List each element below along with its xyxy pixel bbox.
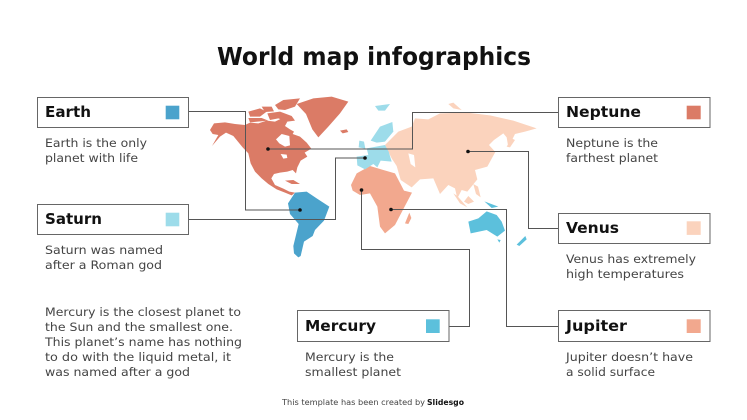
panel: Venus: high temperatures — [566, 267, 684, 281]
panel: Jupiter: Jupiter — [565, 317, 628, 335]
region: Africa — [351, 166, 412, 233]
footer credit: Slidesgo — [427, 398, 464, 407]
panel: Mercury: Mercury — [305, 317, 376, 335]
panel: Mercury: Mercury is the — [305, 350, 394, 364]
panel: Mercury — [298, 310, 449, 379]
region: Europe — [357, 104, 393, 169]
text block: Mercury description: the Sun and the smallest one. — [45, 320, 233, 334]
connector: Jupiter — [389, 208, 558, 326]
region: Asia — [385, 103, 537, 207]
panel: Venus — [558, 214, 710, 281]
panel: Earth: planet with life — [45, 151, 138, 165]
connector: Venus — [466, 150, 558, 228]
text block: Mercury description: This planet’s name has nothing — [44, 335, 242, 349]
panel: Mercury: smallest planet — [305, 365, 402, 379]
panel: Saturn: Saturn — [45, 210, 102, 228]
panel: Saturn: after a Roman god — [45, 258, 162, 272]
footer credit: This template has been created by — [281, 398, 426, 407]
panel: Saturn — [38, 204, 188, 272]
panel: Neptune — [558, 98, 710, 165]
panel: Jupiter — [558, 310, 710, 379]
panel: Earth: Earth — [45, 103, 91, 121]
text block: Mercury description: Mercury is the closest planet to — [45, 305, 241, 319]
region: South America — [288, 192, 329, 257]
connector: Earth — [189, 112, 302, 212]
region: Oceania — [468, 201, 527, 246]
panel: Neptune: Neptune is the — [566, 136, 658, 150]
panel: Jupiter: Jupiter doesn’t have — [565, 350, 693, 364]
title: World map infographics — [217, 42, 531, 71]
text block: Mercury description: was named after a god — [45, 365, 190, 379]
region: North America and Greenland — [210, 97, 348, 195]
panel: Venus: Venus — [566, 219, 619, 237]
text block: Mercury description — [44, 305, 242, 379]
panel: Earth: Earth is the only — [45, 136, 147, 150]
panel: Jupiter: a solid surface — [566, 365, 655, 379]
connector: Mercury — [360, 188, 470, 326]
panel: Saturn: Saturn was named — [45, 243, 163, 257]
connector: Saturn — [189, 156, 367, 220]
panel: Earth — [38, 98, 188, 165]
panel: Venus: Venus has extremely — [566, 252, 696, 266]
world map — [210, 97, 537, 257]
connector: Neptune — [266, 112, 558, 151]
text block: Mercury description: to do with the liquid metal, it — [45, 350, 232, 364]
panel: Neptune: Neptune — [566, 103, 641, 121]
panel: Neptune: farthest planet — [566, 151, 659, 165]
